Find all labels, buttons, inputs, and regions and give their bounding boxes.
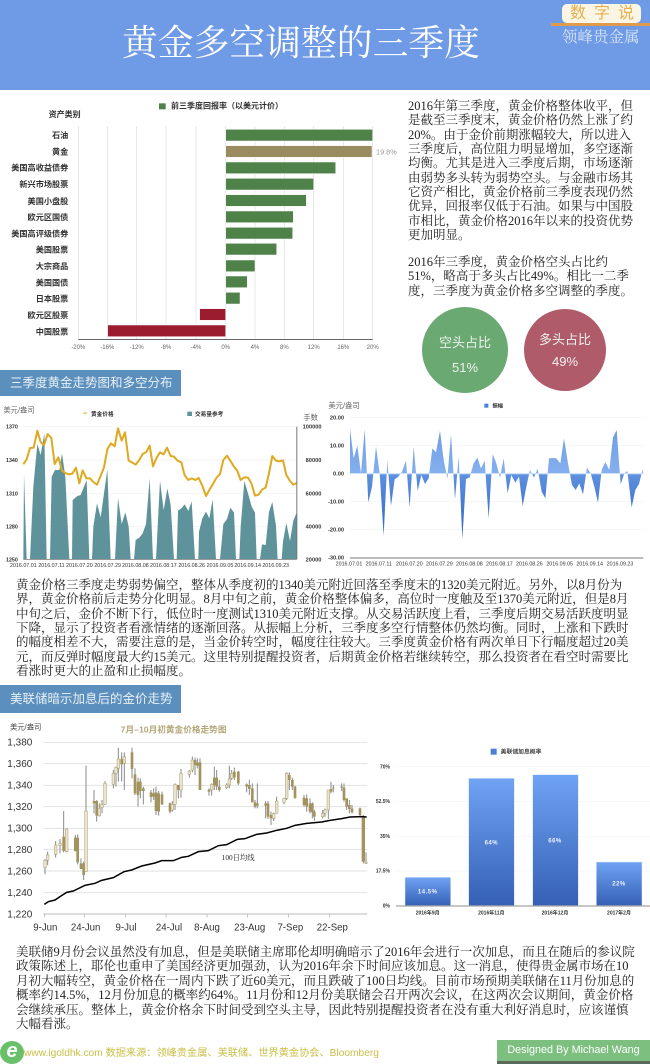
date axis: 2016.07.11 bbox=[38, 563, 65, 569]
text block: Q3 overview: 均衡。尤其是进入三季度后期，市场逐渐 bbox=[408, 156, 633, 170]
date axis: 2016.08.17 bbox=[150, 563, 177, 569]
text block: Q3 overview: 由弱势多头转为弱势空头。与金融市场其 bbox=[408, 171, 633, 185]
text block: fed outlook: 概率约14.5%，12月份加息的概率约64%。11月份和12月份美联储会召开两次会议，在这两次会议期间，黄金价格 bbox=[16, 988, 633, 1002]
legend: 前三季度回报率（以美元计价） bbox=[171, 101, 283, 111]
category labels: 欧元区股票 bbox=[28, 310, 68, 320]
x axis ticks: -16% bbox=[100, 345, 115, 351]
chart: fed hike probability bbox=[376, 747, 650, 916]
y axis: 35% bbox=[380, 834, 391, 840]
legend bbox=[491, 747, 542, 755]
orange rule bbox=[551, 23, 650, 26]
date axis: 2016.09.14 bbox=[234, 563, 261, 569]
text block: long short share: 51%，略高于多头占比49%。相比一二季 bbox=[408, 269, 629, 283]
chart: gold price and volume: 美元/盎司 bbox=[3, 406, 35, 415]
right axis: 40000 bbox=[306, 525, 321, 531]
chart: candlesticks with 100 day average: 100日均线 bbox=[222, 853, 255, 862]
left axis: 1340 bbox=[6, 458, 18, 464]
date axis: 2016.07.01 bbox=[10, 563, 37, 569]
dark candles bbox=[62, 752, 365, 875]
y axis: 1,320 bbox=[7, 802, 33, 813]
chart: gold price and volume bbox=[3, 406, 322, 569]
legend: 黄金价格 bbox=[91, 410, 114, 418]
x axis: 2016年9月 bbox=[416, 909, 440, 916]
designer credit: Designed By Michael Wang bbox=[507, 1044, 640, 1056]
y axis: 1,360 bbox=[7, 759, 33, 770]
circle: long share: 49% bbox=[552, 354, 578, 369]
chart: candlesticks with 100 day average: 美元/盎司 bbox=[10, 723, 41, 732]
chart title: 7月–10月初黄金价格走势图 bbox=[121, 723, 227, 734]
text block: long short share: 度，三季度为黄金价格多空调整的季度。 bbox=[408, 284, 633, 298]
text block: trend analysis: 黄金价格三季度走势弱势偏空，整体从季度初的1340美元附近回落至季度末的1320美元附近。另外，以8月份为 bbox=[16, 578, 622, 592]
text block: Q3 overview: 优异，回报率仅低于石油。如果与中国股 bbox=[408, 199, 633, 213]
y axis: -30.00 bbox=[328, 556, 344, 562]
date axis: 2016.09.23 bbox=[607, 561, 633, 567]
left axis: 1280 bbox=[6, 525, 18, 531]
header banner bbox=[0, 0, 650, 90]
text block: Q3 overview: 是截至三季度末，黄金价格仍然上涨了约 bbox=[408, 113, 633, 127]
date axis: 9-Jun bbox=[33, 923, 57, 934]
date axis bbox=[10, 563, 289, 569]
date axis: 2016.08.26 bbox=[516, 561, 543, 567]
light candles bbox=[44, 757, 367, 872]
text block: fed outlook: 政策陈述上，耶伦也重申了美国经济更加强劲，认为2016年余下时间应该加息。这一消息，使得贵金属市场在10 bbox=[16, 959, 629, 973]
bars bbox=[108, 129, 373, 337]
x axis ticks: -4% bbox=[191, 345, 202, 351]
section heading: Fed hint: 美联储暗示加息后的金价走势 bbox=[10, 692, 173, 706]
candle wicks bbox=[45, 748, 366, 880]
amplitude area bbox=[350, 428, 643, 539]
right axis: 80000 bbox=[306, 458, 321, 464]
text block: Q3 overview: 它资产相比，黄金价格前三季度表现仍然 bbox=[408, 185, 633, 199]
text block: Q3 overview: 2016年第三季度，黄金价格整体收平，但 bbox=[408, 99, 633, 113]
x axis ticks: 12% bbox=[308, 345, 320, 351]
text block: long short share bbox=[408, 255, 633, 298]
text block: fed outlook: 大幅看涨。 bbox=[16, 1017, 79, 1031]
y axis: 1,340 bbox=[7, 781, 33, 792]
x axis ticks: -12% bbox=[130, 345, 144, 351]
x axis bbox=[416, 909, 631, 916]
x axis ticks: 8% bbox=[280, 345, 289, 351]
text block: Q3 overview: 更加明显。 bbox=[408, 228, 471, 242]
category labels: 石油 bbox=[52, 130, 68, 140]
left axis bbox=[6, 425, 18, 563]
text block: trend analysis: 的幅度相差不大，需要注意的是，当金价转空时，幅度往往较大。三季度黄金价格有两次单日下行幅度超过20美 bbox=[16, 635, 629, 649]
x axis: 2016年12月 bbox=[542, 909, 568, 916]
title: 黄金多空调整的三季度 bbox=[122, 23, 480, 63]
gold price line bbox=[23, 428, 297, 496]
date axis: 24-Jun bbox=[71, 923, 100, 934]
bars bbox=[405, 775, 642, 906]
bar values: 66% bbox=[548, 838, 562, 844]
date axis: 2016.09.05 bbox=[546, 561, 573, 567]
bar values: 14.5% bbox=[418, 890, 438, 896]
left axis: 1310 bbox=[6, 491, 18, 497]
left axis: 1250 bbox=[6, 557, 18, 563]
date axis: 22-Sep bbox=[317, 923, 348, 934]
y axis: 1,300 bbox=[7, 824, 33, 835]
text block: trend analysis: 界，黄金价格前后走势分化明显。8月中旬之前，黄金价格整体偏多，高位时一度触及至1370美元附近，但是8月 bbox=[16, 592, 629, 606]
y axis bbox=[7, 738, 33, 920]
bar values: 64% bbox=[485, 840, 498, 846]
text block: Q3 overview: 20%。由于金价前期涨幅较大，所以进入 bbox=[408, 128, 631, 142]
text block: trend analysis bbox=[16, 578, 629, 678]
y axis: 20.00 bbox=[330, 415, 344, 421]
text block: Q3 overview: 市相比，黄金价格2016年以来的投资优势 bbox=[408, 214, 633, 228]
y axis: -10.00 bbox=[328, 500, 344, 506]
circle: long share: 多头占比 bbox=[539, 332, 591, 347]
badge: 数字说: 数字说 bbox=[570, 5, 642, 22]
y axis: 70% bbox=[380, 764, 391, 770]
text block: fed outlook: 美联储9月份会议虽然没有加息，但是美联储主席耶伦却明确暗示了2016年会进行一次加息，而且在随后的参议院 bbox=[16, 945, 635, 959]
legend: 交易量参考 bbox=[195, 410, 224, 418]
category labels: 新兴市场股票 bbox=[19, 179, 68, 189]
date axis: 2016.08.08 bbox=[456, 561, 483, 567]
legend: 美联储加息概率 bbox=[501, 747, 542, 755]
chart: daily amplitude: 美元/盎司 bbox=[328, 401, 360, 410]
right axis: 100000 bbox=[303, 425, 322, 431]
circle: short share bbox=[422, 307, 508, 393]
text block: Q3 overview bbox=[408, 99, 633, 242]
circle: long share bbox=[524, 309, 606, 391]
circle: short share: 51% bbox=[452, 360, 478, 375]
designer credit bbox=[497, 1040, 650, 1064]
y axis: -20.00 bbox=[328, 528, 344, 534]
category labels: 美国高收益债券 bbox=[11, 163, 69, 173]
right axis: 20000 bbox=[306, 557, 321, 563]
date axis: 2016.09.05 bbox=[207, 563, 233, 569]
text block: trend analysis: 下降，显示了投资者看涨情绪的逐渐回落。从振幅上分析，三季度多空行情整体仍然均衡。同时，上涨和下跌时 bbox=[16, 621, 629, 635]
section heading: Q3 trend: 三季度黄金走势图和多空分布 bbox=[10, 376, 173, 390]
y axis: 17.5% bbox=[376, 869, 391, 875]
date axis: 24-Jul bbox=[156, 923, 182, 934]
y axis: 1,260 bbox=[7, 866, 33, 877]
brand name: 领峰贵金属 bbox=[562, 29, 640, 46]
text block: fed outlook: 会继续承压。整体上，黄金价格余下时间受到空头主导，因此特别提醒投资者在没有重大利好消息时，应该谨慎 bbox=[16, 1003, 629, 1017]
y axis: 10.00 bbox=[330, 443, 344, 449]
date axis: 2016.08.08 bbox=[122, 563, 149, 569]
date axis: 2016.07.01 bbox=[336, 561, 362, 567]
section heading: Fed hint bbox=[0, 685, 181, 713]
x axis ticks bbox=[71, 345, 379, 351]
x axis ticks: 0% bbox=[221, 345, 231, 351]
category labels: 中国股票 bbox=[36, 326, 68, 336]
category labels: 美国股票 bbox=[36, 244, 68, 254]
legend: 振幅 bbox=[492, 402, 504, 410]
icon: website logo: e bbox=[6, 1040, 18, 1062]
y axis: 0% bbox=[383, 904, 391, 910]
section heading: Q3 trend bbox=[0, 370, 181, 396]
category labels: 美国小盘股 bbox=[28, 196, 68, 206]
x axis ticks: -20% bbox=[71, 345, 86, 351]
right axis bbox=[303, 425, 322, 563]
100 day moving average bbox=[44, 817, 367, 904]
date axis: 2016.07.11 bbox=[366, 561, 392, 567]
date axis bbox=[33, 923, 348, 934]
x axis: 2017年2月 bbox=[607, 909, 631, 916]
y axis: 1,380 bbox=[7, 738, 33, 749]
chart: gold price and volume: 手数 bbox=[303, 413, 319, 422]
x axis ticks: 16% bbox=[337, 345, 350, 351]
date axis: 7-Sep bbox=[277, 923, 303, 934]
date axis: 8-Aug bbox=[194, 923, 220, 934]
right axis: 60000 bbox=[306, 491, 321, 497]
category labels bbox=[11, 130, 69, 336]
date axis: 2016.07.29 bbox=[94, 563, 121, 569]
text block: trend analysis: 元，而反弹时幅度最大约15美元。这里特别提醒投资者，后期黄金价格若继续转空，那么投资者在看空时需要比 bbox=[16, 650, 629, 664]
text block: trend analysis: 中旬之后，金价不断下行，低位时一度测试1310美元附近支撑。从交易活跃度上看，三季度后期交易活跃度明显 bbox=[16, 607, 629, 621]
bar chart: returns by asset class bbox=[11, 101, 397, 351]
date axis: 9-Jul bbox=[116, 923, 136, 934]
date axis: 2016.07.29 bbox=[426, 561, 453, 567]
date axis: 2016.09.23 bbox=[262, 563, 289, 569]
y axis: 52.5% bbox=[376, 799, 391, 805]
text block: trend analysis: 看涨时更大的止盈和止损幅度。 bbox=[16, 664, 191, 678]
y axis: 1,240 bbox=[7, 888, 33, 899]
x axis ticks: 4% bbox=[251, 345, 260, 351]
category labels: 黄金 bbox=[52, 147, 69, 157]
bar values bbox=[418, 838, 626, 896]
bar values: 22% bbox=[612, 882, 626, 888]
y axis: 1,280 bbox=[7, 845, 33, 856]
x axis: 2016年11月 bbox=[478, 909, 505, 916]
left axis: 1370 bbox=[6, 425, 18, 431]
date axis: 2016.08.26 bbox=[178, 563, 205, 569]
gold value label: 19.8% bbox=[376, 147, 397, 156]
footer sources: www.igoldhk.com 数据来源：领峰贵金属、美联储、世界黄金协会、Bloomberg bbox=[24, 1048, 379, 1059]
category labels: 欧元区国债 bbox=[28, 212, 68, 222]
text block: fed outlook: 月初大幅转空，黄金价格在一周内下跌了近60美元，而且跌破了100日均线。目前市场预期美联储在11月份加息的 bbox=[16, 974, 634, 988]
category labels: 美国高评级债券 bbox=[11, 228, 69, 238]
text block: fed outlook bbox=[16, 945, 635, 1031]
date axis bbox=[336, 561, 633, 567]
legend bbox=[83, 410, 224, 418]
x axis ticks: -8% bbox=[161, 345, 172, 351]
icon: website logo bbox=[0, 1041, 24, 1064]
x axis ticks: 20% bbox=[367, 345, 379, 351]
legend bbox=[484, 402, 504, 410]
y axis bbox=[328, 415, 344, 562]
chart: daily amplitude bbox=[328, 401, 644, 567]
volume area bbox=[23, 433, 297, 559]
axis category title: 资产类别 bbox=[49, 109, 81, 119]
y axis: 0.00 bbox=[333, 471, 344, 477]
date axis: 23-Aug bbox=[234, 923, 265, 934]
text block: Q3 overview: 三季度后，高位阻力明显增加，多空逐渐 bbox=[408, 142, 633, 156]
date axis: 2016.07.20 bbox=[396, 561, 423, 567]
category labels: 大宗商品 bbox=[36, 261, 68, 271]
category labels: 美国国债 bbox=[36, 278, 68, 288]
category labels: 日本股票 bbox=[36, 294, 68, 304]
chart: candlesticks with 100 day average bbox=[7, 723, 368, 934]
y axis bbox=[376, 764, 391, 910]
date axis: 2016.08.17 bbox=[486, 561, 513, 567]
y axis: 1,220 bbox=[7, 909, 33, 920]
date axis: 2016.09.14 bbox=[576, 561, 603, 567]
circle: short share: 空头占比 bbox=[439, 335, 491, 350]
date axis: 2016.07.20 bbox=[66, 563, 93, 569]
text block: long short share: 2016年三季度，黄金价格空头占比约 bbox=[408, 255, 608, 269]
